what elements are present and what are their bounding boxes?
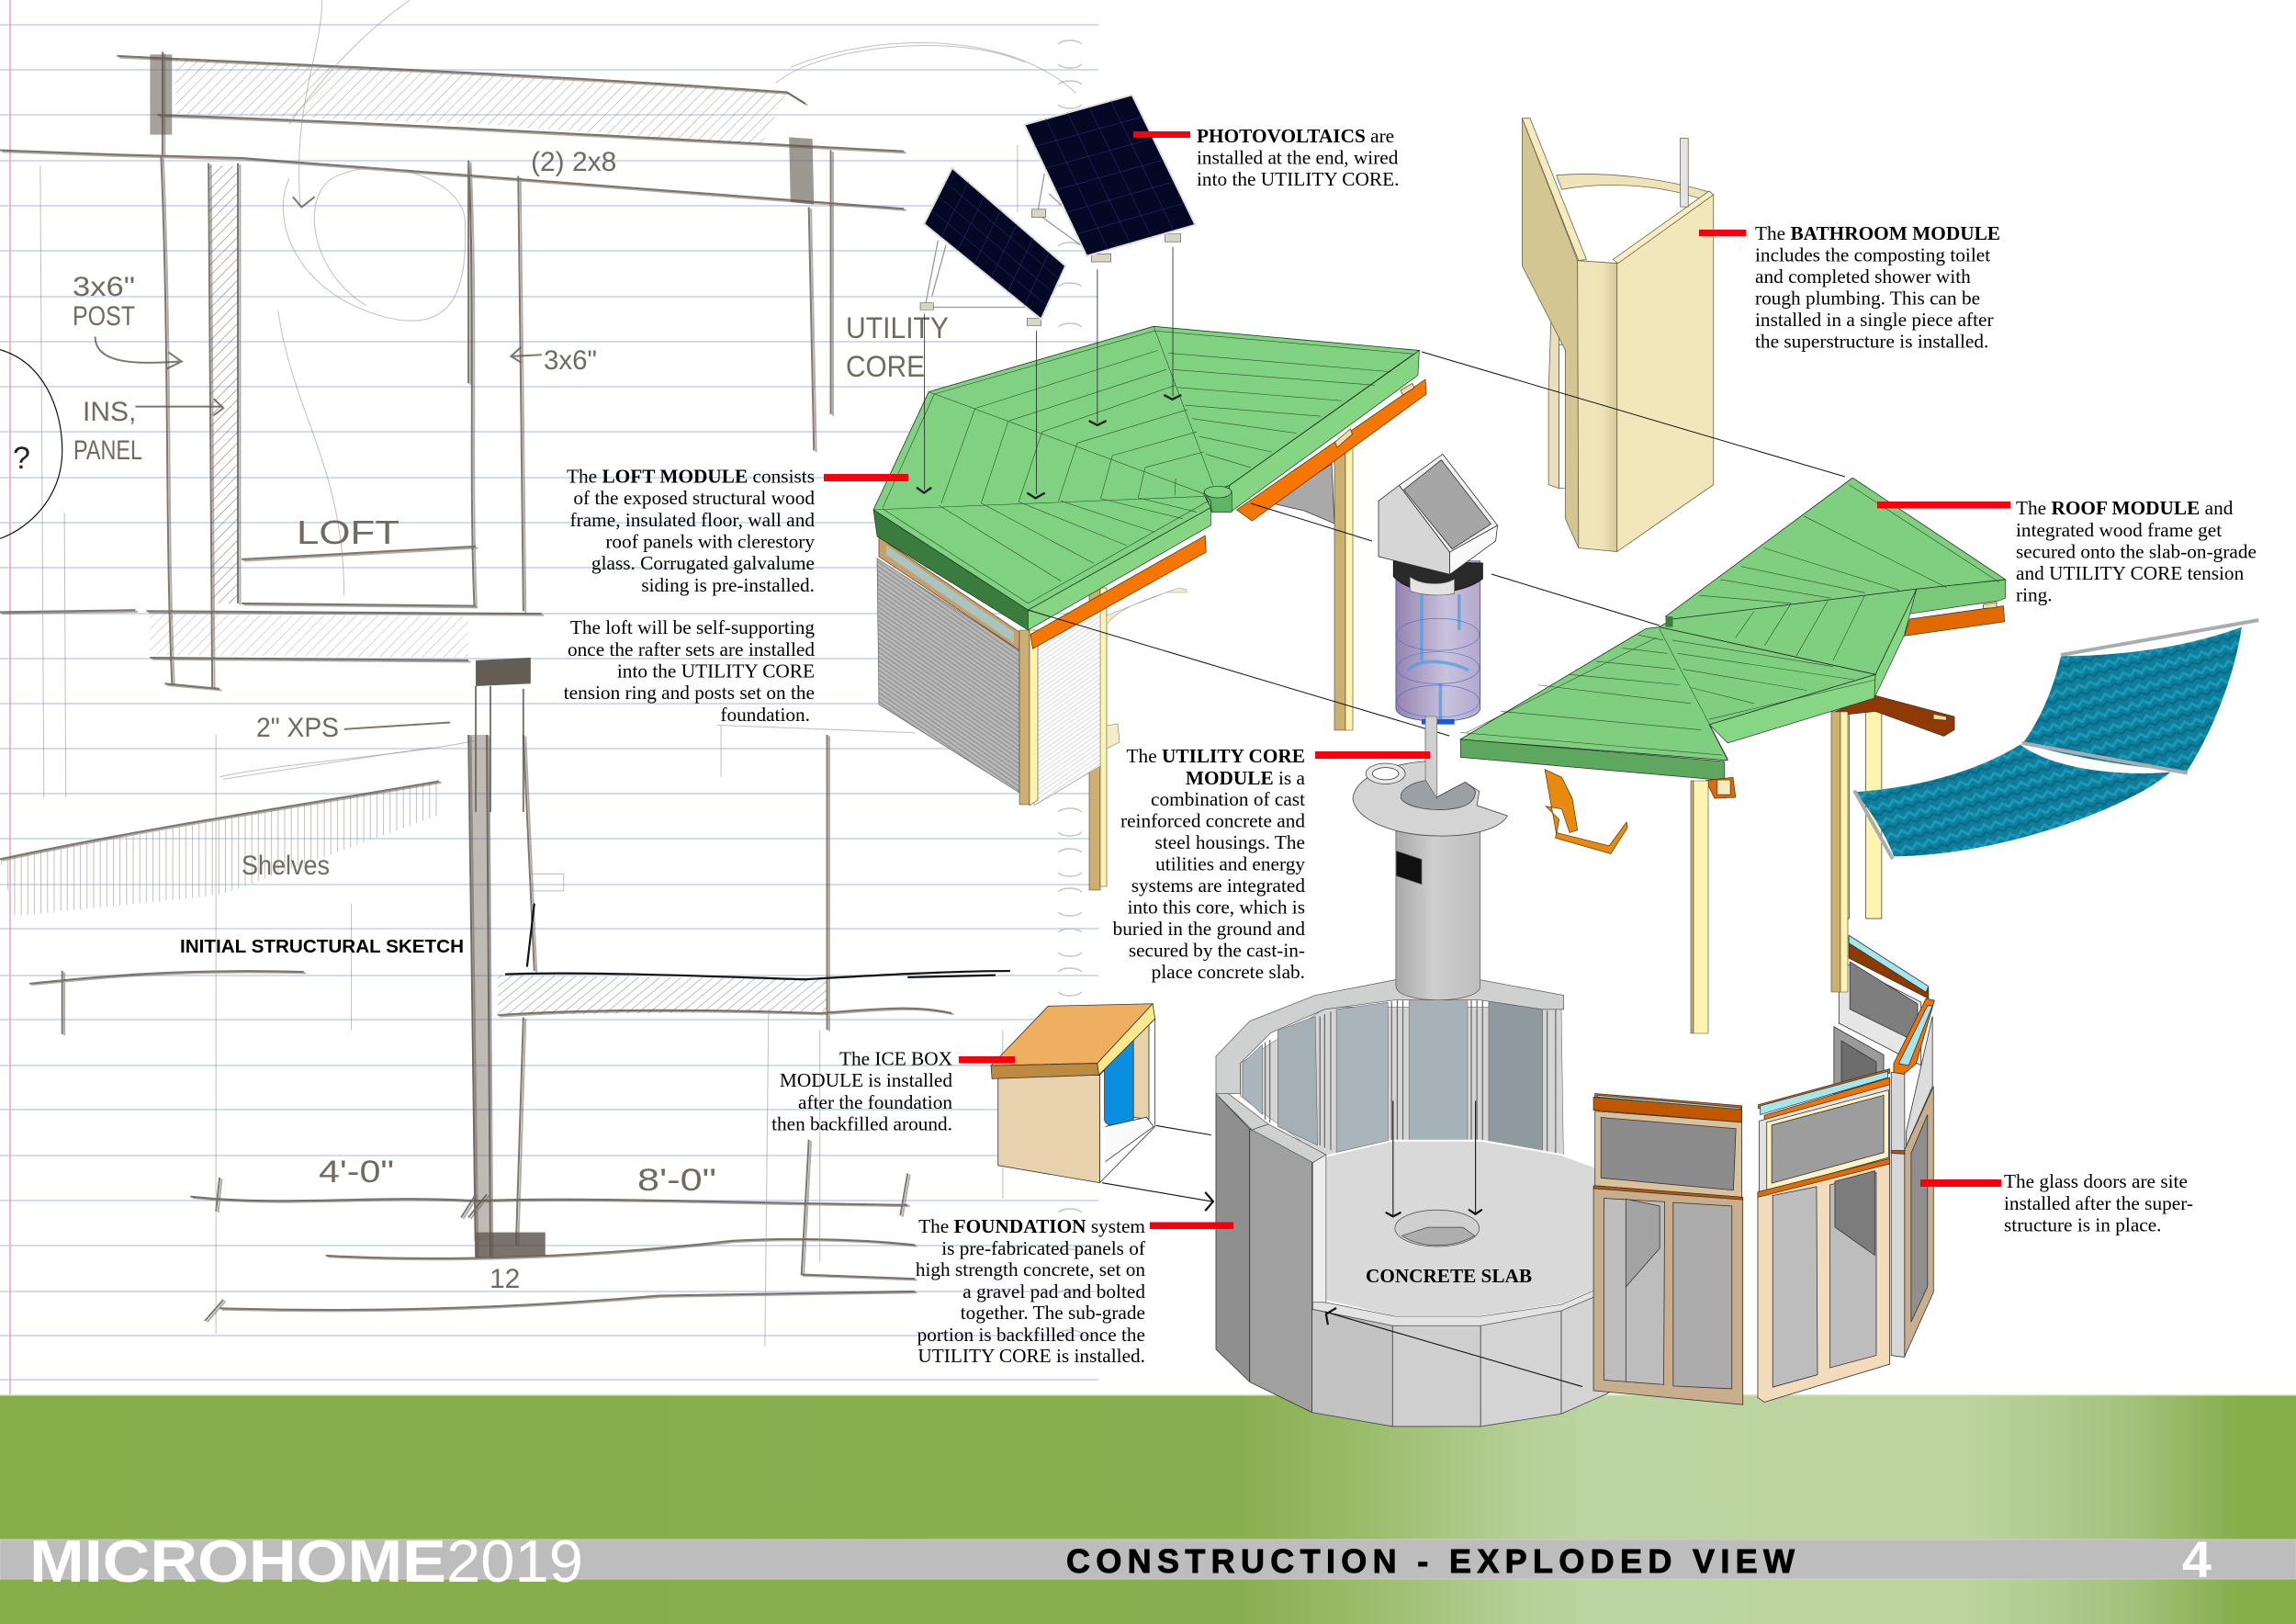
left outer wall: [1216, 1094, 1312, 1413]
callout: utility core module: combination of cast: [1151, 788, 1305, 810]
footer heading: construction exploded view: CONSTRUCTION - EXPLODED VIEW: [1066, 1542, 1795, 1580]
callout: photovoltaics: into the UTILITY CORE.: [1197, 168, 1399, 190]
callout: roof module: The ROOF MODULE and: [2016, 497, 2233, 519]
callout: utility core module: secured by the cast-in-: [1129, 939, 1305, 961]
callout: photovoltaics: PHOTOVOLTAICS are: [1197, 125, 1394, 147]
core rod: [1425, 728, 1435, 768]
column and corner door: [1891, 998, 1934, 1358]
initial structural sketch drawing: 12: [490, 1264, 520, 1294]
back post: [1089, 588, 1120, 890]
callout: utility core module: [1113, 745, 1430, 983]
callout: utility core module: place concrete slab.: [1152, 961, 1305, 983]
callout: loft module: frame, insulated floor, wall and: [570, 509, 815, 531]
roof module (right), hammock and bathroom: [1460, 118, 2258, 919]
chair: [1545, 770, 1627, 853]
glass doors and window sets: [1593, 935, 1934, 1404]
utility core, tank and hood: [1379, 454, 1498, 768]
panel: large PV: [1024, 95, 1196, 256]
callout: photovoltaics: installed at the end, wired: [1197, 147, 1399, 169]
bracket: [1705, 777, 1736, 798]
clerestory window: [879, 537, 1019, 650]
callout: bathroom module: rough plumbing. This can be: [1755, 287, 1980, 309]
callout: foundation: The FOUNDATION system: [918, 1215, 1145, 1237]
initial structural sketch drawing: ?: [13, 441, 30, 476]
footer band: [0, 1394, 2296, 1624]
callout: loft module: tension ring and posts set on the: [564, 682, 815, 704]
roof plank and ridge lines: [873, 326, 1414, 603]
door set centre: [1758, 1069, 1890, 1402]
initial structural sketch drawing: 3x6": [544, 345, 597, 376]
callout: utility core module: The UTILITY CORE: [1127, 745, 1305, 767]
bathroom module: [1522, 118, 1714, 552]
callout: utility core module: systems are integrated: [1131, 874, 1305, 897]
label: concrete slab: CONCRETE SLAB: [1366, 1265, 1532, 1287]
callout: loft module: The LOFT MODULE consists: [567, 465, 815, 487]
callout: ice box: The ICE BOX: [839, 1047, 952, 1069]
core rod lower: [1425, 716, 1437, 798]
callout: utility core module: utilities and energy: [1155, 852, 1305, 874]
corrugated wall left: [877, 558, 1019, 793]
callout: photovoltaics: [1133, 125, 1399, 190]
callout: loft module: [564, 465, 908, 726]
callout: roof module: [1877, 497, 2257, 606]
callout: bathroom module: The BATHROOM MODULE: [1755, 222, 2000, 244]
callout: loft module: The loft will be self-supporting: [570, 616, 815, 638]
core column: [1396, 829, 1480, 1000]
callout: roof module: secured onto the slab-on-grade: [2016, 540, 2257, 562]
slab: [1322, 1141, 1632, 1316]
roof fascia: [873, 350, 1419, 630]
callout: foundation: high strength concrete, set on: [916, 1258, 1145, 1280]
roof top surfaces: [1460, 478, 2006, 761]
footer title: MICROHOME2019: 2019: [446, 1528, 583, 1595]
corner post: [1019, 630, 1038, 806]
solar panels: [920, 95, 1196, 325]
slab opening: [1395, 1210, 1480, 1246]
core top plate: [1353, 761, 1507, 836]
callout: loft module: of the exposed structural wood: [573, 487, 815, 509]
cream arc behind: [1107, 588, 1187, 625]
callout: foundation: UTILITY CORE is installed.: [917, 1345, 1145, 1367]
post left: [1691, 781, 1708, 1033]
callout: glass doors: installed after the super-: [2004, 1192, 2193, 1214]
callout: foundation: a gravel pad and bolted: [962, 1280, 1145, 1303]
initial structural sketch drawing: (2) 2x8: [531, 147, 616, 177]
initial structural sketch drawing: Shelves: [242, 851, 330, 881]
callout: loft module: foundation.: [720, 704, 810, 726]
ice box module: [991, 1004, 1155, 1183]
callout: glass doors: structure is in place.: [2004, 1214, 2162, 1236]
callout: utility core module: buried in the ground and: [1113, 918, 1305, 940]
initial structural sketch drawing: LOFT: [297, 513, 400, 551]
caption: initial structural sketch: INITIAL STRUCTURAL SKETCH: [180, 937, 464, 957]
posts and beams under roof: [1460, 580, 2006, 919]
callout: ice box: after the foundation: [798, 1091, 952, 1113]
drop lines from panels: [917, 247, 1181, 498]
rear window and door set: [1834, 935, 1929, 1258]
footer title: MICROHOME2019: [29, 1528, 583, 1595]
initial structural sketch drawing: 3x6": [73, 272, 135, 302]
callout: roof module: and UTILITY CORE tension: [2016, 562, 2245, 584]
callout: foundation: [916, 1215, 1233, 1367]
callout: utility core module: reinforced concrete and: [1120, 810, 1305, 832]
foundation and concrete slab: [991, 716, 1632, 1427]
tension ring: [1393, 561, 1482, 592]
initial structural sketch drawing: PANEL: [73, 435, 142, 466]
callout: loft module: into the UTILITY CORE: [617, 660, 815, 682]
callout: loft module: roof panels with clerestory: [605, 531, 815, 553]
callout: foundation: portion is backfilled once the: [917, 1324, 1145, 1346]
exploded guide lines: [1028, 352, 1845, 736]
callout: loft module: siding is pre-installed.: [641, 574, 815, 596]
roof plank lines: [1460, 485, 1999, 759]
loft module assembly: [873, 95, 1426, 890]
mount supports: [925, 174, 1108, 307]
callout: bathroom module: installed in a single piece after: [1755, 309, 1994, 331]
front outer wall: [1312, 1281, 1632, 1427]
initial structural sketch drawing: CORE: [846, 350, 925, 383]
initial structural sketch drawing: INS,: [83, 397, 136, 427]
callout: utility core module: MODULE is a: [1186, 767, 1305, 789]
callout: roof module: ring.: [2016, 584, 2053, 606]
callout: utility core module: into this core, which is: [1128, 897, 1305, 919]
door set left: [1593, 1093, 1743, 1404]
callout: ice box: then backfilled around.: [771, 1113, 952, 1135]
callout: ice box: MODULE is installed: [780, 1069, 952, 1091]
callout: ice box: [771, 1047, 1015, 1135]
callout: bathroom module: includes the composting toilet: [1755, 244, 1990, 266]
initial structural sketch drawing: UTILITY: [846, 311, 949, 344]
under-roof window: [1272, 464, 1334, 524]
orange beams: [1030, 379, 1426, 648]
initial structural sketch drawing: 2" XPS: [256, 713, 339, 743]
callout: foundation: is pre-fabricated panels of: [941, 1237, 1146, 1259]
callout: glass doors: [1920, 1170, 2193, 1236]
callout: loft module: glass. Corrugated galvalume: [591, 552, 815, 574]
inner back walls: [1241, 1000, 1564, 1167]
pilaster stripes: [1266, 1000, 1556, 1155]
callout: loft module: once the rafter sets are installed: [568, 638, 815, 660]
initial structural sketch drawing: POST: [73, 301, 135, 332]
panel: small PV: [924, 168, 1065, 320]
callout: roof module: integrated wood frame get: [2016, 519, 2222, 541]
callout: foundation: together. The sub-grade: [961, 1302, 1145, 1324]
wall right, striped siding: [1034, 597, 1100, 806]
solar hood: [1379, 454, 1498, 574]
initial structural sketch drawing: [0, 0, 1076, 1347]
page number: 4: [2182, 1530, 2212, 1588]
initial structural sketch drawing: 8'-0": [637, 1163, 716, 1198]
post middle: [1831, 712, 1848, 992]
callout: bathroom module: [1699, 222, 2000, 353]
callout: bathroom module: and completed shower with: [1755, 265, 1971, 288]
callout: utility core module: steel housings. The: [1155, 831, 1305, 853]
insulated tank: [1396, 561, 1480, 725]
post, right: [1334, 445, 1353, 730]
initial structural sketch drawing: 4'-0": [319, 1155, 394, 1190]
callout: glass doors: The glass doors are site: [2004, 1170, 2188, 1192]
coping: [1216, 980, 1632, 1325]
hammock: teal shade sail: [1854, 620, 2258, 859]
roof top surface: [873, 326, 1419, 610]
foundation arrows: [1102, 1100, 1582, 1387]
footer title: MICROHOME2019: MICROHOME: [29, 1528, 446, 1595]
callout: bathroom module: the superstructure is installed.: [1755, 331, 1988, 353]
hub ring: [1204, 486, 1232, 512]
